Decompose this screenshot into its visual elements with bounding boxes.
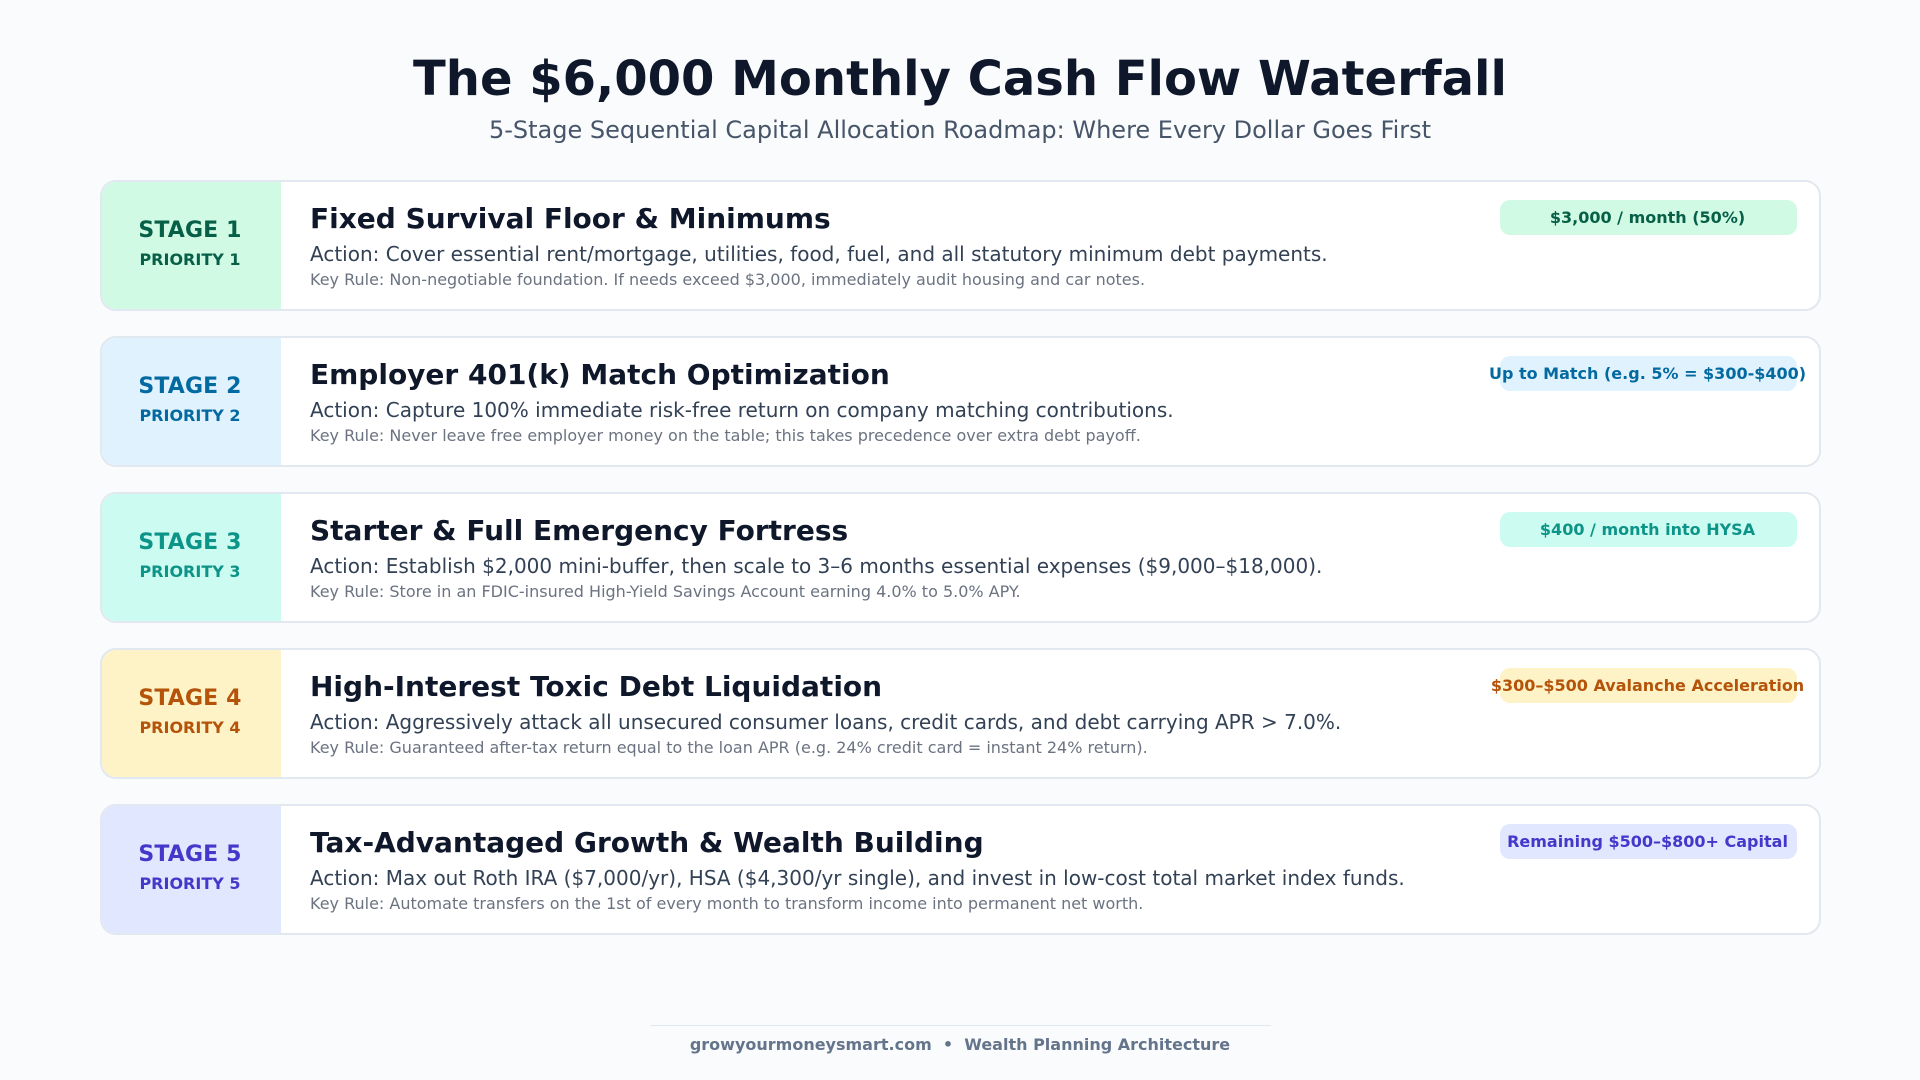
stage 5 heading: Tax-Advantaged Growth & Wealth Building: [310, 826, 984, 859]
stage 4 action: Action: Aggressively attack all unsecured consumer loans, credit cards, and debt carrying APR > 7.0%.: [310, 710, 1341, 734]
stage 3 amount badge: $400 / month into HYSA: [1540, 520, 1755, 539]
stage 5 amount badge: [1500, 824, 1797, 859]
stage 1 amount badge: [1500, 200, 1797, 235]
stage 1 label block: [102, 182, 281, 309]
stage 2 label block: [102, 338, 281, 465]
stage 5 label block: [102, 806, 281, 933]
subtitle: 5-Stage Sequential Capital Allocation Roadmap: Where Every Dollar Goes First: [489, 116, 1431, 144]
stage 3 label block: [102, 494, 281, 621]
stage 3 heading: Starter & Full Emergency Fortress: [310, 514, 848, 547]
panel: stage 3 card: [100, 492, 1821, 623]
priority 4 label: PRIORITY 4: [139, 718, 241, 737]
stage 2 action: Action: Capture 100% immediate risk-free return on company matching contributions.: [310, 398, 1174, 422]
panel: stage 5 card: [100, 804, 1821, 935]
stage 5 label: STAGE 5: [138, 842, 242, 867]
panel: stage 2 card: [100, 336, 1821, 467]
stage 4 amount badge: $300–$500 Avalanche Acceleration: [1491, 676, 1804, 695]
panel: stage 4 card: [100, 648, 1821, 779]
stage 4 amount badge: [1500, 668, 1797, 703]
stage 3 key rule: Key Rule: Store in an FDIC-insured High-Yield Savings Account earning 4.0% to 5.0% APY.: [310, 582, 1021, 601]
stage 1 heading: Fixed Survival Floor & Minimums: [310, 202, 831, 235]
panel: stage 1 card: [100, 180, 1821, 311]
footer text: growyourmoneysmart.com • Wealth Planning Architecture: [690, 1035, 1230, 1054]
stage 3 action: Action: Establish $2,000 mini-buffer, then scale to 3–6 months essential expenses ($9,000–$18,000).: [310, 554, 1322, 578]
stage 4 label: STAGE 4: [138, 686, 242, 711]
stage 1 label: STAGE 1: [138, 218, 242, 243]
stage 1 key rule: Key Rule: Non-negotiable foundation. If needs exceed $3,000, immediately audit housing and car notes.: [310, 270, 1145, 289]
stage 2 key rule: Key Rule: Never leave free employer money on the table; this takes precedence over extra debt payoff.: [310, 426, 1141, 445]
stage 2 amount badge: Up to Match (e.g. 5% = $300-$400): [1489, 364, 1806, 383]
priority 1 label: PRIORITY 1: [139, 250, 241, 269]
stage 1 amount badge: $3,000 / month (50%): [1550, 208, 1745, 227]
stage 3 amount badge: [1500, 512, 1797, 547]
stage 2 amount badge: [1500, 356, 1797, 391]
priority 5 label: PRIORITY 5: [139, 874, 241, 893]
priority 2 label: PRIORITY 2: [139, 406, 241, 425]
stage 1 action: Action: Cover essential rent/mortgage, utilities, food, fuel, and all statutory minimum debt payments.: [310, 242, 1328, 266]
stage 2 heading: Employer 401(k) Match Optimization: [310, 358, 890, 391]
title: The $6,000 Monthly Cash Flow Waterfall: [413, 51, 1507, 107]
stage 4 heading: High-Interest Toxic Debt Liquidation: [310, 670, 882, 703]
stage 4 label block: [102, 650, 281, 777]
stage 5 action: Action: Max out Roth IRA ($7,000/yr), HSA ($4,300/yr single), and invest in low-cost total market index funds.: [310, 866, 1405, 890]
stage 5 key rule: Key Rule: Automate transfers on the 1st of every month to transform income into permanent net worth.: [310, 894, 1143, 913]
priority 3 label: PRIORITY 3: [139, 562, 241, 581]
stage 3 label: STAGE 3: [138, 530, 242, 555]
stage 5 amount badge: Remaining $500–$800+ Capital: [1507, 832, 1788, 851]
stage 2 label: STAGE 2: [138, 374, 242, 399]
stage 4 key rule: Key Rule: Guaranteed after-tax return equal to the loan APR (e.g. 24% credit card = instant 24% return).: [310, 738, 1148, 757]
footer divider: [650, 1025, 1271, 1026]
